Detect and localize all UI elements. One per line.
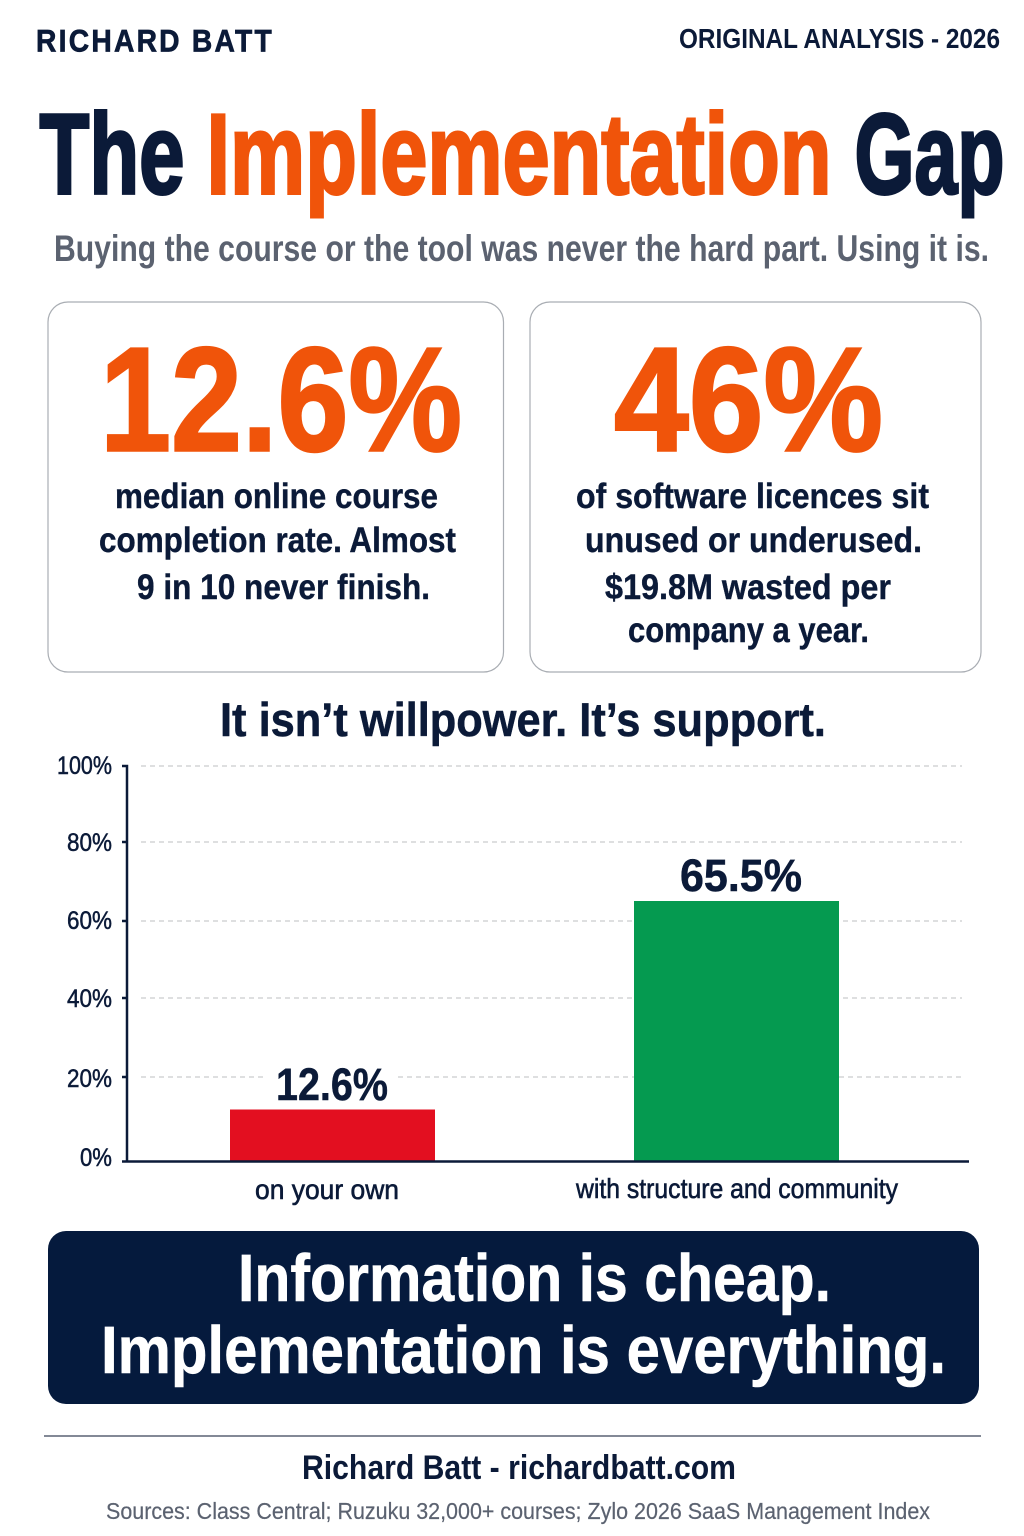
y axis labels: 60% xyxy=(67,907,112,935)
big number: 46%: 46% xyxy=(614,318,883,482)
header: author name: RICHARD BATT xyxy=(36,22,274,58)
course stat description: median online course xyxy=(115,477,438,516)
course stat description xyxy=(99,477,456,607)
footer: sources: Sources: Class Central; Ruzuku 32,000+ courses; Zylo 2026 SaaS Management Index xyxy=(106,1498,930,1524)
course stat description: completion rate. Almost xyxy=(99,521,456,560)
panel: course completion stat xyxy=(48,302,504,672)
licence stat description: $19.8M wasted per xyxy=(605,568,891,607)
footer rule xyxy=(44,1435,981,1437)
title: Implementation xyxy=(206,92,832,218)
value label: 12.6%: 12.6% xyxy=(276,1059,388,1110)
licence stat description: unused or underused. xyxy=(585,521,922,560)
big number: 12.6%: 12.6% xyxy=(100,318,462,482)
footer: author and site: Richard Batt - richardbatt.com xyxy=(302,1449,736,1487)
licence stat description: of software licences sit xyxy=(576,477,929,516)
value label: 65.5%: 65.5% xyxy=(680,850,802,901)
bar: on your own xyxy=(230,1110,435,1162)
licence stat description xyxy=(576,477,929,650)
licence stat description: company a year. xyxy=(628,611,869,650)
chart heading: It isn’t willpower. It’s support. xyxy=(220,693,826,746)
bar chart xyxy=(57,752,969,1205)
category label: on your own: on your own xyxy=(255,1174,399,1205)
y axis labels xyxy=(57,752,112,1172)
callout banner: Information is cheap. xyxy=(238,1241,831,1316)
y axis labels: 80% xyxy=(67,829,112,857)
callout banner xyxy=(48,1231,979,1404)
category label: with structure and community: with structure and community xyxy=(575,1173,898,1204)
axes xyxy=(122,766,969,1162)
y axis labels: 20% xyxy=(67,1065,112,1093)
y axis labels: 100% xyxy=(57,752,112,780)
panel: software licence stat xyxy=(530,302,981,672)
bar: with structure and community xyxy=(634,901,839,1162)
course stat description: 9 in 10 never finish. xyxy=(137,568,430,607)
title: The xyxy=(40,92,184,218)
callout banner: Implementation is everything. xyxy=(101,1313,946,1388)
y axis labels: 40% xyxy=(67,985,112,1013)
y axis labels: 0% xyxy=(80,1144,112,1172)
